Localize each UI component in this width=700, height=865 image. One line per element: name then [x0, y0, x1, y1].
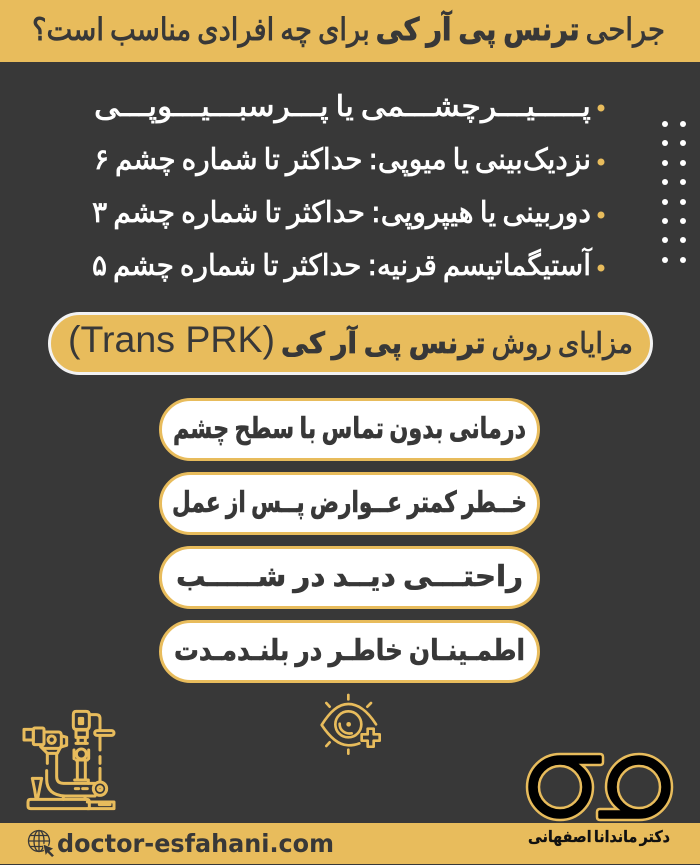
- benefit pill 3: راحتـــی دیــد در شـــــب: [176, 559, 523, 593]
- logo: right ring: [597, 754, 672, 820]
- section heading pill: [50, 314, 652, 374]
- decorative dot grid: [662, 121, 686, 263]
- icon: eye with plus: [322, 695, 380, 754]
- footer band: [0, 823, 700, 864]
- logo caption: دکتر ماندانا اصفهانی: [528, 827, 670, 846]
- logo: [527, 754, 672, 820]
- benefit pill 4: [160, 622, 538, 682]
- benefit pill 4: اطمـینـان خاطـر در بلنـدمـدت: [174, 633, 525, 667]
- title: جراحی ترنس پی آر کی برای چه افرادی مناسب است؟: [32, 10, 665, 48]
- list item: hyperopia: دوربینی یا هیپروپی: حداکثر تا شماره چشم ۳: [92, 195, 591, 230]
- website url: doctor-esfahani.com: [57, 829, 334, 858]
- benefit pill 3: [160, 548, 538, 608]
- list item: presbyopia: پـــــیـــرچشـــمی یا پـــرسبـــیـــوپـــی: [94, 89, 591, 124]
- icon: slit lamp microscope: [24, 711, 114, 809]
- benefit pill 2: خــطر کمتر عــوارض پــس از عمل: [172, 485, 527, 520]
- benefit pill 1: درمانی بدون تماس با سطح چشم: [173, 411, 526, 446]
- list item: astigmatism: آستیگماتیسم قرنیه: حداکثر تا شماره چشم ۵: [92, 247, 593, 283]
- panel: candidate list: [92, 89, 604, 283]
- heading text: persian: مزایای روش ترنس پی آر کی: [281, 325, 633, 361]
- logo: left ring: [527, 754, 603, 820]
- list item: myopia: نزدیک‌بینی یا میوپی: حداکثر تا شماره چشم ۶: [94, 142, 591, 177]
- header band: [0, 0, 700, 62]
- heading text: latin: (Trans PRK): [68, 319, 275, 360]
- benefit pill 1: [160, 400, 538, 460]
- benefit pill 2: [160, 474, 538, 534]
- icon: globe with cursor: [28, 830, 54, 858]
